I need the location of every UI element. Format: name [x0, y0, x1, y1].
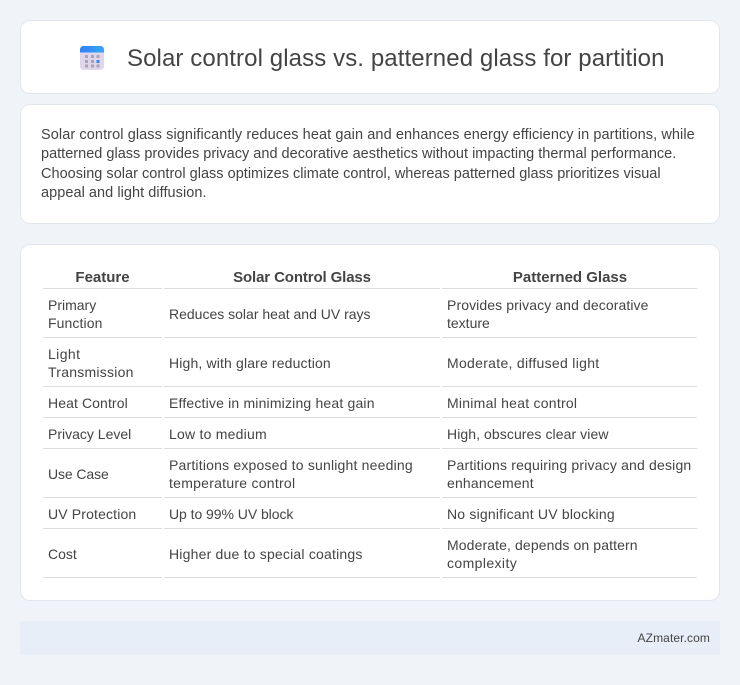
row: Use Case: Partitions requiring privacy and design	[447, 457, 691, 473]
row: Primary Function: Function	[48, 315, 102, 331]
row: Primary Function: Primary	[48, 297, 96, 313]
row: Privacy Level: Low to medium	[169, 426, 267, 442]
row: Primary Function: texture	[447, 315, 490, 331]
icon: calendar	[80, 46, 104, 70]
footer bar	[20, 621, 720, 655]
table header: Solar Control Glass: Solar Control Glass	[233, 269, 371, 286]
row: Cost	[48, 537, 638, 571]
row: Privacy Level: High, obscures clear view	[447, 426, 609, 442]
row: Use Case: temperature control	[169, 475, 295, 491]
row: Privacy Level: Privacy Level	[48, 426, 131, 442]
row: Heat Control	[48, 395, 577, 411]
row: Primary Function: Provides privacy and decorative	[447, 297, 649, 313]
row: Light Transmission: Light	[48, 346, 80, 362]
text block: summary: appeal and light diffusion.	[41, 185, 207, 201]
row: Heat Control: Heat Control	[48, 395, 128, 411]
row: Use Case: Partitions exposed to sunlight needing	[169, 457, 413, 473]
row: Cost: complexity	[447, 555, 517, 571]
panel: title card	[20, 20, 720, 94]
row: Light Transmission: Moderate, diffused light	[447, 355, 599, 371]
row: Use Case: enhancement	[447, 475, 534, 491]
row: Heat Control: Minimal heat control	[447, 395, 577, 411]
title: Solar control glass vs. patterned glass for partition	[127, 45, 665, 72]
row: Primary Function	[48, 297, 649, 331]
row: UV Protection: No significant UV blocking	[447, 506, 615, 522]
table header: Patterned Glass: Patterned Glass	[513, 269, 627, 286]
row: Use Case	[48, 457, 691, 491]
row: Primary Function: Reduces solar heat and UV rays	[169, 306, 371, 322]
text block: summary: patterned glass provides privacy and decorative aesthetics without impacting thermal performance.	[41, 146, 676, 162]
row: Privacy Level	[48, 426, 609, 442]
row: Light Transmission	[48, 346, 600, 380]
panel: comparison table card	[20, 244, 720, 601]
text block: summary: Solar control glass significantly reduces heat gain and enhances energy efficiency in partitions, while	[41, 127, 695, 143]
row: Heat Control: Effective in minimizing heat gain	[169, 395, 375, 411]
table header: Feature: Feature	[75, 269, 130, 286]
row: UV Protection: UV Protection	[48, 506, 136, 522]
row: Light Transmission: High, with glare reduction	[169, 355, 331, 371]
row: Cost: Higher due to special coatings	[169, 546, 363, 562]
row: Use Case: Use Case	[48, 466, 109, 482]
text block: summary: Choosing solar control glass optimizes climate control, whereas patterned glass prioritizes visual	[41, 166, 661, 182]
row: UV Protection	[48, 506, 615, 522]
panel: summary card	[20, 104, 720, 224]
footer text: AZmater.com	[638, 631, 710, 645]
text block: summary	[41, 127, 695, 201]
row: Cost: Cost	[48, 546, 77, 562]
row: UV Protection: Up to 99% UV block	[169, 506, 293, 522]
row: Cost: Moderate, depends on pattern	[447, 537, 638, 553]
row: Light Transmission: Transmission	[48, 364, 134, 380]
comparison table	[43, 269, 697, 578]
